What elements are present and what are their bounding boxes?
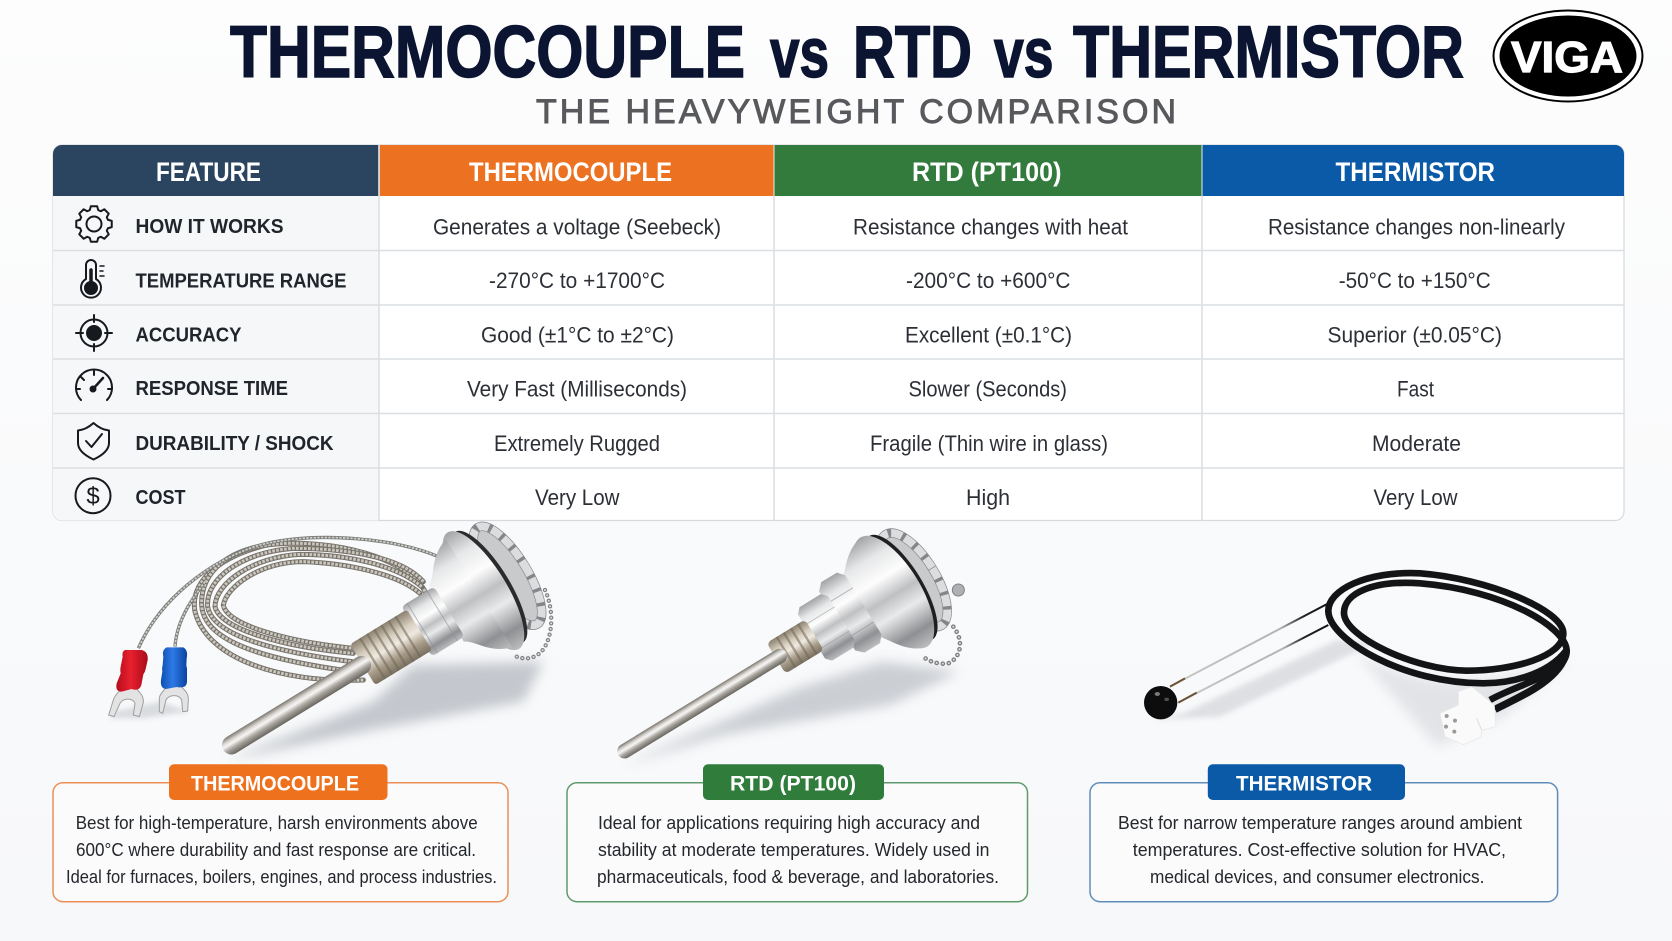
- image: thermistor sensor: [1144, 573, 1570, 747]
- tag: rtd: [703, 764, 884, 800]
- row: durability: Moderate: [1372, 431, 1461, 456]
- row: how it works: HOW IT WORKS: [136, 215, 284, 238]
- thin leads: [138, 538, 438, 648]
- title: vs: [994, 14, 1054, 92]
- header: thermistor: [1202, 145, 1624, 196]
- row: response time: [76, 370, 1434, 402]
- row: temperature range: -50°C to +150°C: [1339, 268, 1491, 293]
- row: accuracy: Excellent (±0.1°C): [905, 322, 1072, 348]
- icon: gear: [76, 206, 112, 242]
- row: how it works: Generates a voltage (Seebeck): [433, 214, 721, 240]
- row: temperature range: -200°C to +600°C: [906, 268, 1071, 293]
- tag: rtd: RTD (PT100): [730, 771, 856, 795]
- logo: VIGA: [1494, 10, 1642, 102]
- row: durability: Fragile (Thin wire in glass): [870, 431, 1108, 456]
- row: response time: Very Fast (Milliseconds): [467, 376, 687, 402]
- row: cost: Very Low: [1374, 485, 1458, 510]
- title: THERMOCOUPLE: [230, 12, 745, 93]
- text: thermistor description: [1118, 812, 1522, 887]
- cable coil: [194, 543, 427, 680]
- image: thermocouple sensor: [109, 506, 563, 808]
- row: durability: DURABILITY / SHOCK: [136, 432, 334, 455]
- row: cost: COST: [136, 486, 186, 509]
- terminals: [109, 647, 188, 717]
- tag: thermistor: [1208, 764, 1405, 800]
- icon: thermometer: [81, 260, 104, 298]
- row: how it works: [76, 206, 1565, 242]
- row: response time: Slower (Seconds): [908, 376, 1067, 402]
- header: thermocouple: [379, 145, 774, 196]
- row: temperature range: [81, 260, 1491, 298]
- tag: thermocouple: [169, 764, 388, 800]
- logo: VIGA: VIGA: [1511, 33, 1623, 82]
- row: accuracy: [76, 315, 1502, 351]
- icon: dollar: $: [86, 483, 100, 510]
- tag: thermocouple: THERMOCOUPLE: [191, 771, 359, 795]
- text: rtd description: pharmaceuticals, food & beverage, and laboratories.: [597, 866, 999, 887]
- chain: [923, 584, 964, 664]
- text: thermocouple description: Ideal for furnaces, boilers, engines, and process industries.: [66, 866, 497, 887]
- bead: [1144, 686, 1177, 719]
- text: rtd description: Ideal for applications requiring high accuracy and: [598, 812, 980, 833]
- text: thermistor description: temperatures. Cost-effective solution for HVAC,: [1133, 839, 1506, 860]
- row: how it works: Resistance changes with heat: [853, 214, 1128, 240]
- row: cost: High: [966, 485, 1010, 510]
- subtitle: THE HEAVYWEIGHT COMPARISON: [536, 93, 1176, 131]
- image: rtd sensor: [588, 512, 968, 814]
- row: accuracy: Good (±1°C to ±2°C): [481, 322, 674, 348]
- icon: dollar: [76, 478, 110, 513]
- text: thermistor description: Best for narrow temperature ranges around ambient: [1118, 812, 1522, 833]
- row: durability: Extremely Rugged: [494, 431, 660, 456]
- row: how it works: Resistance changes non-linearly: [1268, 214, 1565, 240]
- tag: thermistor: THERMISTOR: [1236, 771, 1372, 795]
- row: accuracy: ACCURACY: [136, 324, 242, 346]
- chain: [513, 590, 551, 658]
- title: vs: [770, 14, 829, 92]
- icon: gauge: [76, 370, 112, 400]
- title: THERMISTOR: [1073, 12, 1464, 93]
- text: thermistor description: medical devices, and consumer electronics.: [1150, 866, 1484, 887]
- header: feature: FEATURE: [156, 157, 261, 187]
- panel: rtd use: [567, 764, 1028, 902]
- panel: thermistor use: [1090, 764, 1558, 902]
- text: rtd description: [597, 812, 999, 887]
- text: rtd description: stability at moderate temperatures. Widely used in: [598, 839, 990, 860]
- row: durability: [78, 423, 1461, 460]
- connector: [1440, 687, 1496, 745]
- icon: shield: [78, 423, 109, 460]
- header: rtd: [774, 145, 1202, 196]
- row: temperature range: TEMPERATURE RANGE: [136, 270, 346, 292]
- title: RTD: [853, 12, 972, 93]
- probe assembly: [588, 512, 968, 814]
- text: thermocouple description: [66, 812, 497, 887]
- title: [230, 12, 1464, 93]
- header: thermocouple: THERMOCOUPLE: [469, 157, 672, 187]
- row: cost: Very Low: [535, 485, 620, 510]
- leads: [1170, 603, 1328, 703]
- black cable: [1328, 573, 1567, 700]
- header: feature: [53, 145, 379, 196]
- probe assembly: [188, 506, 563, 808]
- table header: [53, 145, 1624, 196]
- row: temperature range: -270°C to +1700°C: [489, 268, 665, 293]
- comparison table: [53, 145, 1624, 520]
- header: thermistor: THERMISTOR: [1336, 157, 1495, 187]
- row: cost: [76, 478, 1458, 513]
- row: accuracy: Superior (±0.05°C): [1328, 322, 1502, 348]
- row: response time: Fast: [1397, 376, 1434, 402]
- icon: target: [76, 315, 112, 351]
- panel: thermocouple use: [53, 764, 508, 902]
- text: thermocouple description: Best for high-temperature, harsh environments above: [76, 812, 478, 833]
- header: rtd: RTD (PT100): [912, 157, 1062, 187]
- text: thermocouple description: 600°C where durability and fast response are critical.: [76, 839, 476, 860]
- row: response time: RESPONSE TIME: [136, 377, 288, 400]
